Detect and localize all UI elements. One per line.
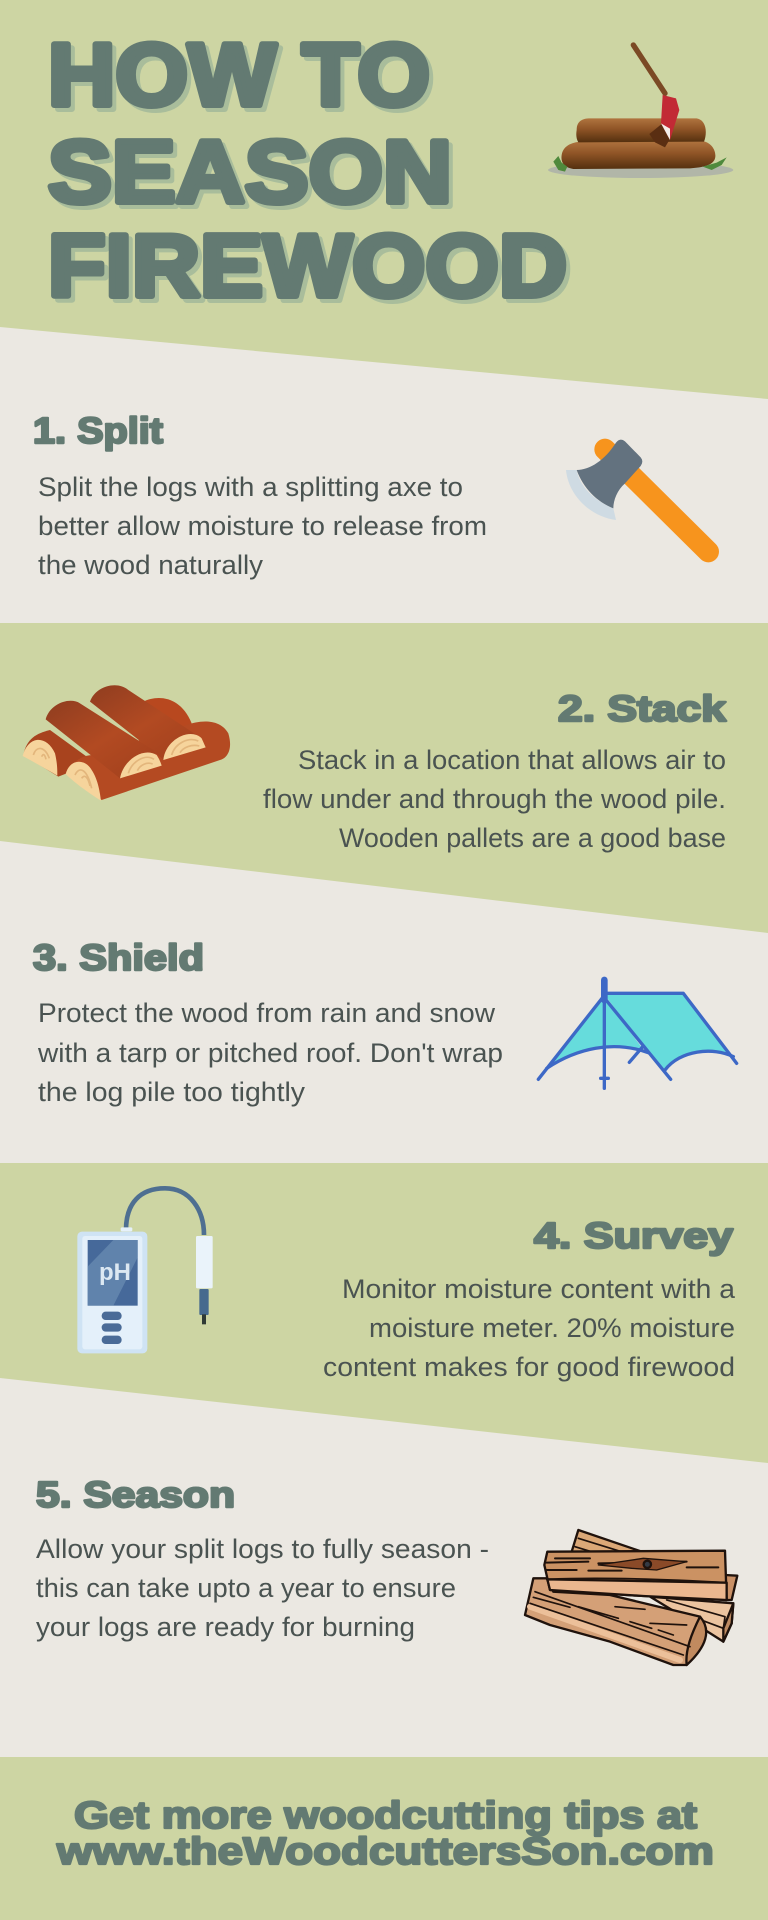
text block: shield instructions: [37, 998, 503, 1107]
icon: moisture meter: pH: [99, 1259, 131, 1286]
icon: seasoned logs: [525, 1530, 737, 1665]
text block: stack instructions: Stack in a location that allows air to: [298, 745, 726, 775]
heading: 4. Survey: 4. Survey: [534, 1215, 733, 1256]
text block: season instructions: this can take upto a year to ensure: [36, 1573, 456, 1603]
text block: survey instructions: content makes for good firewood: [323, 1352, 735, 1382]
text block: stack instructions: [263, 745, 726, 853]
icon: tarp shelter: [538, 980, 737, 1088]
text block: split instructions: Split the logs with a splitting axe to: [38, 472, 463, 502]
footer text: Get more woodcutting tips at: [74, 1795, 697, 1837]
text block: season instructions: Allow your split logs to fully season -: [36, 1534, 489, 1564]
panel: step 2 stack: [23, 685, 727, 853]
footer text: www.theWoodcuttersSon.com: [56, 1831, 714, 1873]
panel: step 4 survey: [77, 1188, 736, 1382]
heading: 3. Shield: 3. Shield: [33, 937, 204, 978]
text block: stack instructions: Wooden pallets are a good base: [339, 823, 726, 853]
footer text: [56, 1795, 714, 1873]
icon: axe in stacked logs: [548, 45, 733, 178]
text block: survey instructions: [323, 1274, 736, 1382]
heading: 5. Season: 5. Season: [36, 1474, 235, 1515]
text block: shield instructions: the log pile too tightly: [38, 1077, 306, 1107]
text block: shield instructions: with a tarp or pitched roof. Don't wrap: [37, 1038, 503, 1068]
title: FIREWOOD: [48, 216, 567, 315]
text block: shield instructions: Protect the wood from rain and snow: [38, 998, 496, 1028]
text block: split instructions: the wood naturally: [38, 550, 264, 580]
text block: season instructions: [36, 1534, 489, 1642]
panel: footer call to action: [0, 1757, 768, 1920]
text block: split instructions: [38, 472, 487, 580]
title: SEASON: [48, 122, 452, 221]
heading: 2. Stack: 2. Stack: [558, 688, 727, 729]
panel: step 1 split: [0, 327, 768, 623]
icon: log stack: [23, 685, 230, 801]
heading: 1. Split: 1. Split: [33, 410, 163, 451]
panel: step 3 shield: [0, 841, 768, 1163]
panel: step 5 season: [0, 1378, 768, 1757]
title: HOW TO: [48, 25, 430, 124]
text block: split instructions: better allow moisture to release from: [38, 511, 487, 541]
text block: season instructions: your logs are ready for burning: [36, 1612, 415, 1642]
icon: splitting axe: [566, 440, 708, 552]
text block: survey instructions: Monitor moisture content with a: [342, 1274, 736, 1304]
text block: stack instructions: flow under and through the wood pile.: [263, 784, 726, 814]
title: [48, 25, 567, 315]
icon: moisture meter: [77, 1188, 213, 1353]
text block: survey instructions: moisture meter. 20% moisture: [369, 1313, 735, 1343]
